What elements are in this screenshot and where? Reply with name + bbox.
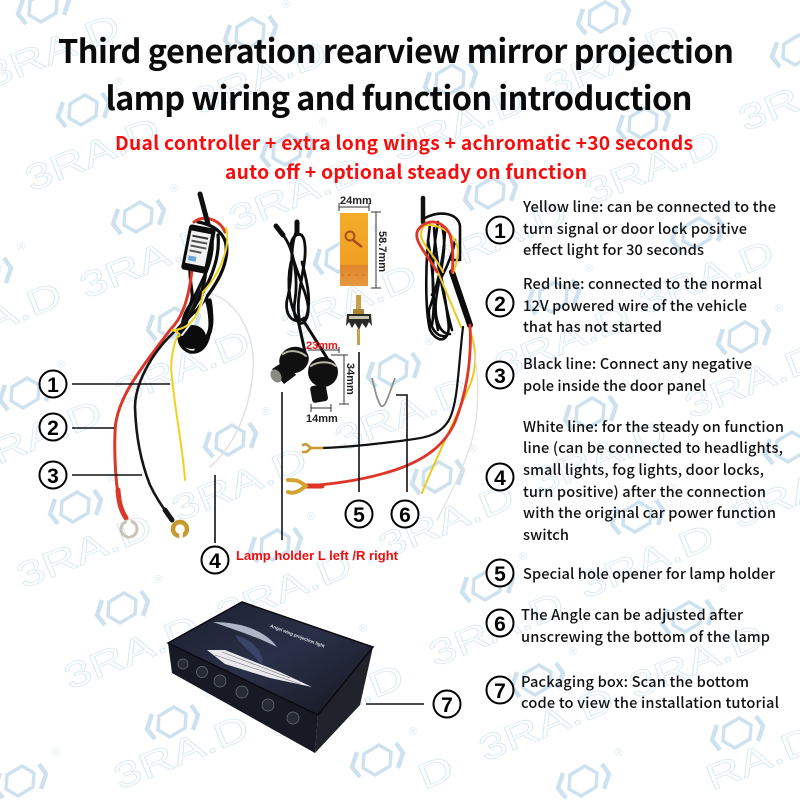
leader lines xyxy=(72,352,424,704)
watermark pattern: 3RA.D xyxy=(579,122,726,212)
watermark pattern: ® xyxy=(17,241,25,253)
orange package xyxy=(339,195,388,288)
orange package: 58.7mm xyxy=(376,231,388,272)
watermark pattern: 3RA.D xyxy=(489,296,636,386)
watermark pattern: ® xyxy=(522,159,530,171)
wing light on box xyxy=(207,650,312,687)
lamp holder label: Lamp holder L left /R right xyxy=(236,548,399,563)
white inner strand xyxy=(182,295,205,335)
right wiring harness xyxy=(288,198,478,520)
lamp dimensions: 23mm xyxy=(306,340,338,352)
watermark pattern: ® xyxy=(115,76,123,88)
item 5: 5 xyxy=(494,563,506,586)
item 2: that has not started xyxy=(523,316,662,337)
watermark pattern: 3RA.D xyxy=(186,32,333,122)
item 2: 12V powered wire of the vehicle xyxy=(523,295,747,316)
right terminals xyxy=(303,444,322,452)
item 7: 7 xyxy=(494,680,506,703)
watermark pattern: ® xyxy=(469,443,477,455)
box front icons xyxy=(178,659,299,724)
watermark pattern: 3RA.D xyxy=(166,439,313,529)
right lamp xyxy=(308,357,338,403)
watermark pattern: 3RA.D xyxy=(74,216,221,306)
item 3: pole inside the door panel xyxy=(523,375,706,396)
item 5 xyxy=(486,560,775,586)
item 4: line (can be connected to headlights, xyxy=(523,437,783,458)
title: lamp wiring and function introduction xyxy=(106,73,692,120)
item 3 xyxy=(486,353,752,396)
watermark pattern: ® xyxy=(372,223,380,235)
watermark pattern: 3RA.D xyxy=(526,412,673,502)
watermark pattern: ® xyxy=(775,303,783,315)
item 2 xyxy=(486,273,762,337)
watermark pattern: 3RA.D xyxy=(19,109,166,199)
hole opener xyxy=(346,295,372,345)
item 4: White line: for the steady on function xyxy=(523,416,784,437)
left wiring harness with controller xyxy=(115,194,253,538)
watermark pattern: ® xyxy=(519,551,527,563)
subtitle: Dual controller + extra long wings + achromatic +30 seconds xyxy=(115,128,693,156)
watermark pattern: ® xyxy=(107,473,115,485)
watermark pattern: 3RA.D xyxy=(423,584,570,674)
item 4: 4 xyxy=(494,467,506,490)
item 7 xyxy=(486,671,779,713)
watermark pattern: ® xyxy=(569,646,577,658)
left numbered markers: 7 xyxy=(441,694,453,717)
lamp dimensions: 34mm xyxy=(344,363,356,395)
item 1: turn signal or door lock positive xyxy=(523,218,747,239)
watermark pattern: ® xyxy=(409,726,417,738)
item 3: Black line: Connect any negative xyxy=(523,353,752,374)
controller box xyxy=(181,224,216,274)
item 2: Red line: connected to the normal xyxy=(523,273,762,294)
watermark pattern: D xyxy=(412,747,459,797)
watermark pattern: 3RA.D xyxy=(11,506,158,596)
black cable coil xyxy=(179,222,227,352)
watermark pattern: ® xyxy=(319,116,327,128)
antenna stub xyxy=(200,194,208,224)
black wire xyxy=(135,285,200,520)
watermark pattern: ® xyxy=(622,379,630,391)
subtitle: auto off + optional steady on function xyxy=(225,157,587,185)
subtitle xyxy=(115,128,693,185)
wire terminals xyxy=(121,521,137,537)
yellow wire xyxy=(171,228,227,480)
watermark pattern: 3RA.D xyxy=(373,476,520,566)
item 2: 2 xyxy=(494,293,506,316)
left numbered markers: 1 xyxy=(47,374,59,397)
watermark pattern: ® xyxy=(425,336,433,348)
watermark pattern: 3RA.D xyxy=(573,516,720,606)
watermark pattern: ® xyxy=(669,483,677,495)
watermark pattern: ® xyxy=(482,46,490,58)
watermark pattern: 3RA.D xyxy=(473,679,620,769)
watermark pattern: ® xyxy=(675,89,683,101)
watermark pattern: ® xyxy=(205,289,213,301)
watermark pattern: 3RA.D xyxy=(263,656,410,746)
watermark pattern: 3RA.D xyxy=(539,16,686,106)
item 4: turn positive) after the connection xyxy=(523,481,766,502)
watermark pattern: 3RA.D xyxy=(386,79,533,169)
watermark pattern: 3RA.D xyxy=(329,369,476,459)
white wire xyxy=(208,293,253,467)
left numbered markers: 6 xyxy=(399,504,411,527)
watermark pattern: ® xyxy=(769,699,777,711)
red wire xyxy=(115,218,225,495)
right yellow wire xyxy=(421,225,475,493)
package dimensions xyxy=(339,203,381,288)
title: Third generation rearview mirror projection xyxy=(58,26,734,73)
orange package: 24mm xyxy=(340,195,372,207)
left numbered markers: 2 xyxy=(47,417,59,440)
left numbered markers: 4 xyxy=(209,550,221,573)
item 6 xyxy=(486,604,770,647)
watermark pattern: 3RA.D xyxy=(223,149,370,239)
item 4 xyxy=(486,416,784,545)
watermark pattern: ® xyxy=(615,747,623,759)
watermark pattern: 3RA.D xyxy=(108,707,255,797)
lamp dimensions: 14mm xyxy=(306,413,338,425)
item 4: switch xyxy=(523,524,569,545)
watermark pattern: 3RA.D xyxy=(211,544,358,634)
watermark pattern: ® xyxy=(52,747,60,759)
item 1 xyxy=(486,196,776,260)
V clip xyxy=(372,378,395,406)
connector xyxy=(452,272,470,325)
lamp dimensions xyxy=(306,340,356,425)
item 4: small lights, fog lights, door locks, xyxy=(523,459,764,480)
left numbered markers: 3 xyxy=(47,465,59,488)
watermark pattern: 3RA.D xyxy=(109,322,256,412)
watermark pattern: 3RA.D xyxy=(623,616,770,706)
item 1: Yellow line: can be connected to the xyxy=(522,196,776,217)
lamp holders xyxy=(268,222,338,403)
item 7: code to view the installation tutorial xyxy=(521,692,779,713)
item 6: The Angle can be adjusted after xyxy=(521,604,743,625)
item 1: effect light for 30 seconds xyxy=(523,239,704,260)
watermark pattern: ® xyxy=(170,183,178,195)
title xyxy=(58,26,734,120)
left lamp xyxy=(268,343,313,385)
watermark pattern: ® xyxy=(719,583,727,595)
watermark pattern: ® xyxy=(359,623,367,635)
item 5: Special hole opener for lamp holder xyxy=(523,563,775,584)
watermark pattern: ® xyxy=(729,199,737,211)
left numbered markers xyxy=(40,370,460,718)
item 3: 3 xyxy=(494,365,506,388)
watermark pattern: 3RA.D xyxy=(276,256,423,346)
watermark pattern: ® xyxy=(204,688,212,700)
item 6: unscrewing the bottom of the lamp xyxy=(521,626,770,647)
watermark pattern: ® xyxy=(57,359,65,371)
left numbered markers: 5 xyxy=(353,504,365,527)
watermark pattern: 3RA.D xyxy=(58,607,205,697)
packaging box xyxy=(168,602,373,753)
item 4: with the original car power function xyxy=(523,502,776,523)
box lid text: Angel wing projection light xyxy=(270,623,326,649)
right white wire xyxy=(437,335,478,520)
right black wire xyxy=(322,327,463,448)
watermark pattern: ® xyxy=(307,511,315,523)
right red wire xyxy=(306,222,470,486)
watermark pattern: 3RA.D xyxy=(426,192,573,282)
watermark pattern: ® xyxy=(154,574,162,586)
item 7: Packaging box: Scan the bottom xyxy=(521,671,749,692)
watermark pattern: ® xyxy=(262,406,270,418)
car silhouette on box xyxy=(213,622,277,647)
watermark pattern: ® xyxy=(585,263,593,275)
item 1: 1 xyxy=(494,220,506,243)
watermark pattern: 3RA.D xyxy=(633,232,780,322)
item 6: 6 xyxy=(494,613,506,636)
